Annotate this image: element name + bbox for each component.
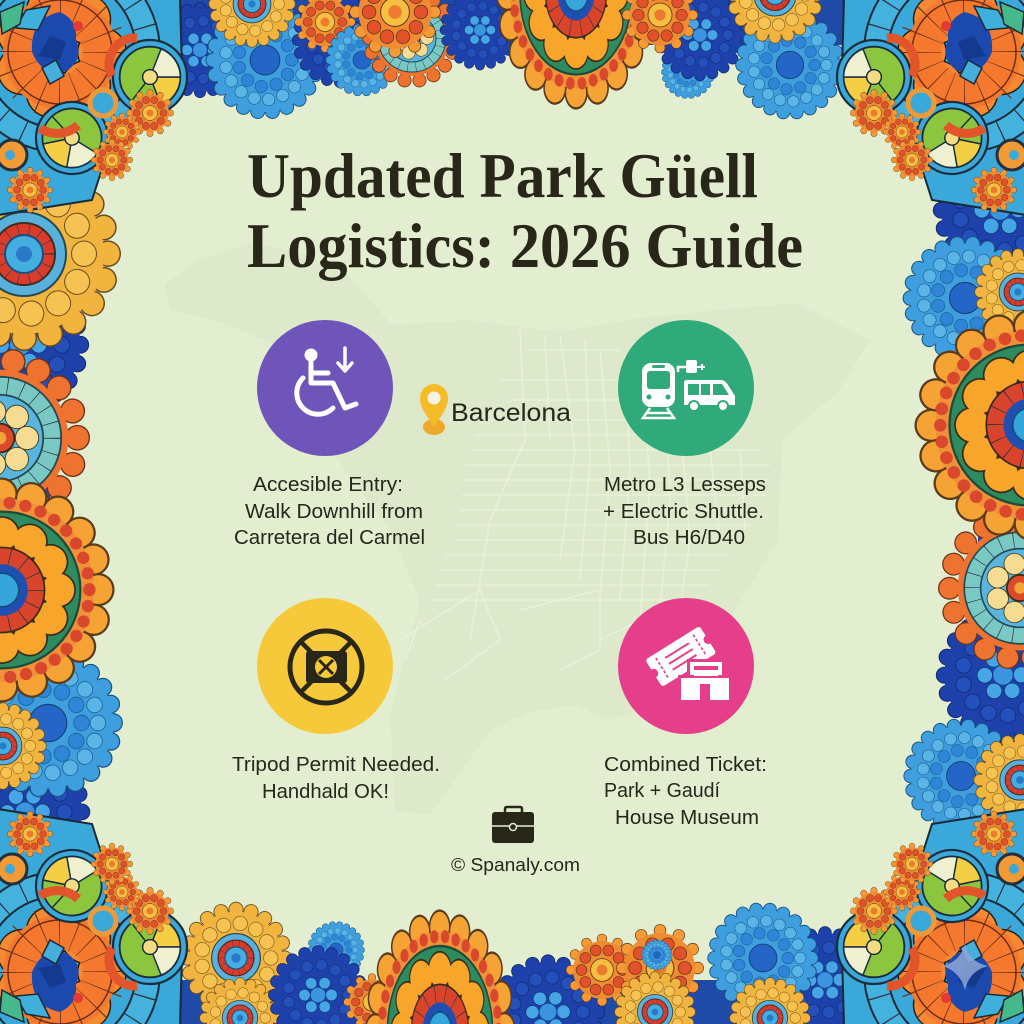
credit: © Spanaly.com (451, 855, 580, 875)
flower: right edge column (910, 151, 1024, 826)
text: accessible entry caption: Walk Downhill from (245, 500, 423, 523)
location pin: Barcelona (420, 384, 571, 435)
panel: accessible entry (234, 320, 425, 549)
flower: left edge column (0, 170, 114, 869)
text: transport caption: + Electric Shuttle. (603, 500, 764, 523)
faded Barcelona map watermark (165, 243, 870, 815)
text: combined ticket caption: House Museum (615, 806, 759, 829)
title: Logistics: 2026 Guide (247, 211, 803, 281)
text: transport caption (603, 473, 766, 549)
flower: bottom-left corner (0, 809, 187, 1024)
title (247, 141, 803, 281)
flower: bottom edge row (187, 909, 872, 1024)
text: tripod caption: Tripod Permit Needed. (232, 753, 440, 776)
text: accessible entry caption: Carretera del Carmel (234, 526, 425, 549)
title: Updated Park Güell (247, 141, 758, 211)
icon: briefcase (492, 807, 534, 843)
panel: transport (603, 320, 766, 549)
icon: metro train and electric shuttle (618, 320, 754, 456)
text: accessible entry caption: Accesible Entry: (253, 473, 403, 496)
flower: bottom-right corner (837, 809, 1024, 1024)
icon: crossed-out camera (257, 598, 393, 734)
text: tripod caption: Handhald OK! (262, 780, 389, 803)
text: combined ticket caption (604, 753, 767, 829)
text: tripod caption (232, 753, 440, 803)
text: combined ticket caption: Park + Gaudí (604, 779, 720, 802)
text: transport caption: Bus H6/D40 (633, 526, 745, 549)
text: transport caption: Metro L3 Lesseps (604, 473, 766, 496)
location pin: Barcelona: Barcelona (451, 399, 571, 427)
panel: tripod permit (232, 598, 440, 803)
text: combined ticket caption: Combined Ticket: (604, 753, 767, 776)
flower: top edge row (158, 0, 838, 113)
flower: top-right corner (837, 0, 1024, 215)
icon: wheelchair with downhill arrow (257, 320, 393, 456)
text: accessible entry caption (234, 473, 425, 549)
panel: combined ticket (604, 598, 767, 829)
sparkle mark, bottom right (942, 944, 988, 990)
icon: ticket and Gaudí house (618, 598, 754, 734)
flower: top-left corner (0, 0, 187, 215)
